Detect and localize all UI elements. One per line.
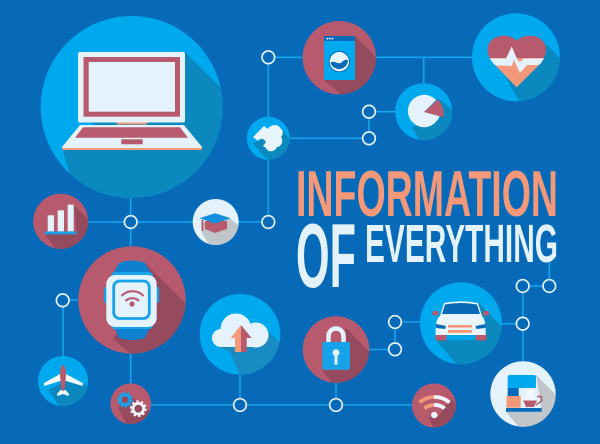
icon: smartwatch <box>78 246 186 354</box>
icon: gears <box>110 383 151 424</box>
connector lines <box>60 57 549 405</box>
icon: bar chart <box>33 194 88 249</box>
node rings <box>56 51 556 411</box>
icon: laptop circle <box>40 16 223 198</box>
icon: washing machine <box>302 21 376 94</box>
icon: airplane <box>38 356 88 406</box>
icon: coffee maker <box>490 361 556 427</box>
infographic canvas: OF <box>296 206 356 307</box>
icon: wifi <box>412 384 456 428</box>
icon: puzzle piece <box>246 116 290 160</box>
icon: pie chart <box>395 83 452 140</box>
icon: car <box>420 282 502 364</box>
icon: graduation cap <box>192 199 239 245</box>
icon: cloud upload <box>200 294 280 375</box>
icon: heart with pulse <box>472 13 560 102</box>
icon: padlock <box>302 316 370 383</box>
